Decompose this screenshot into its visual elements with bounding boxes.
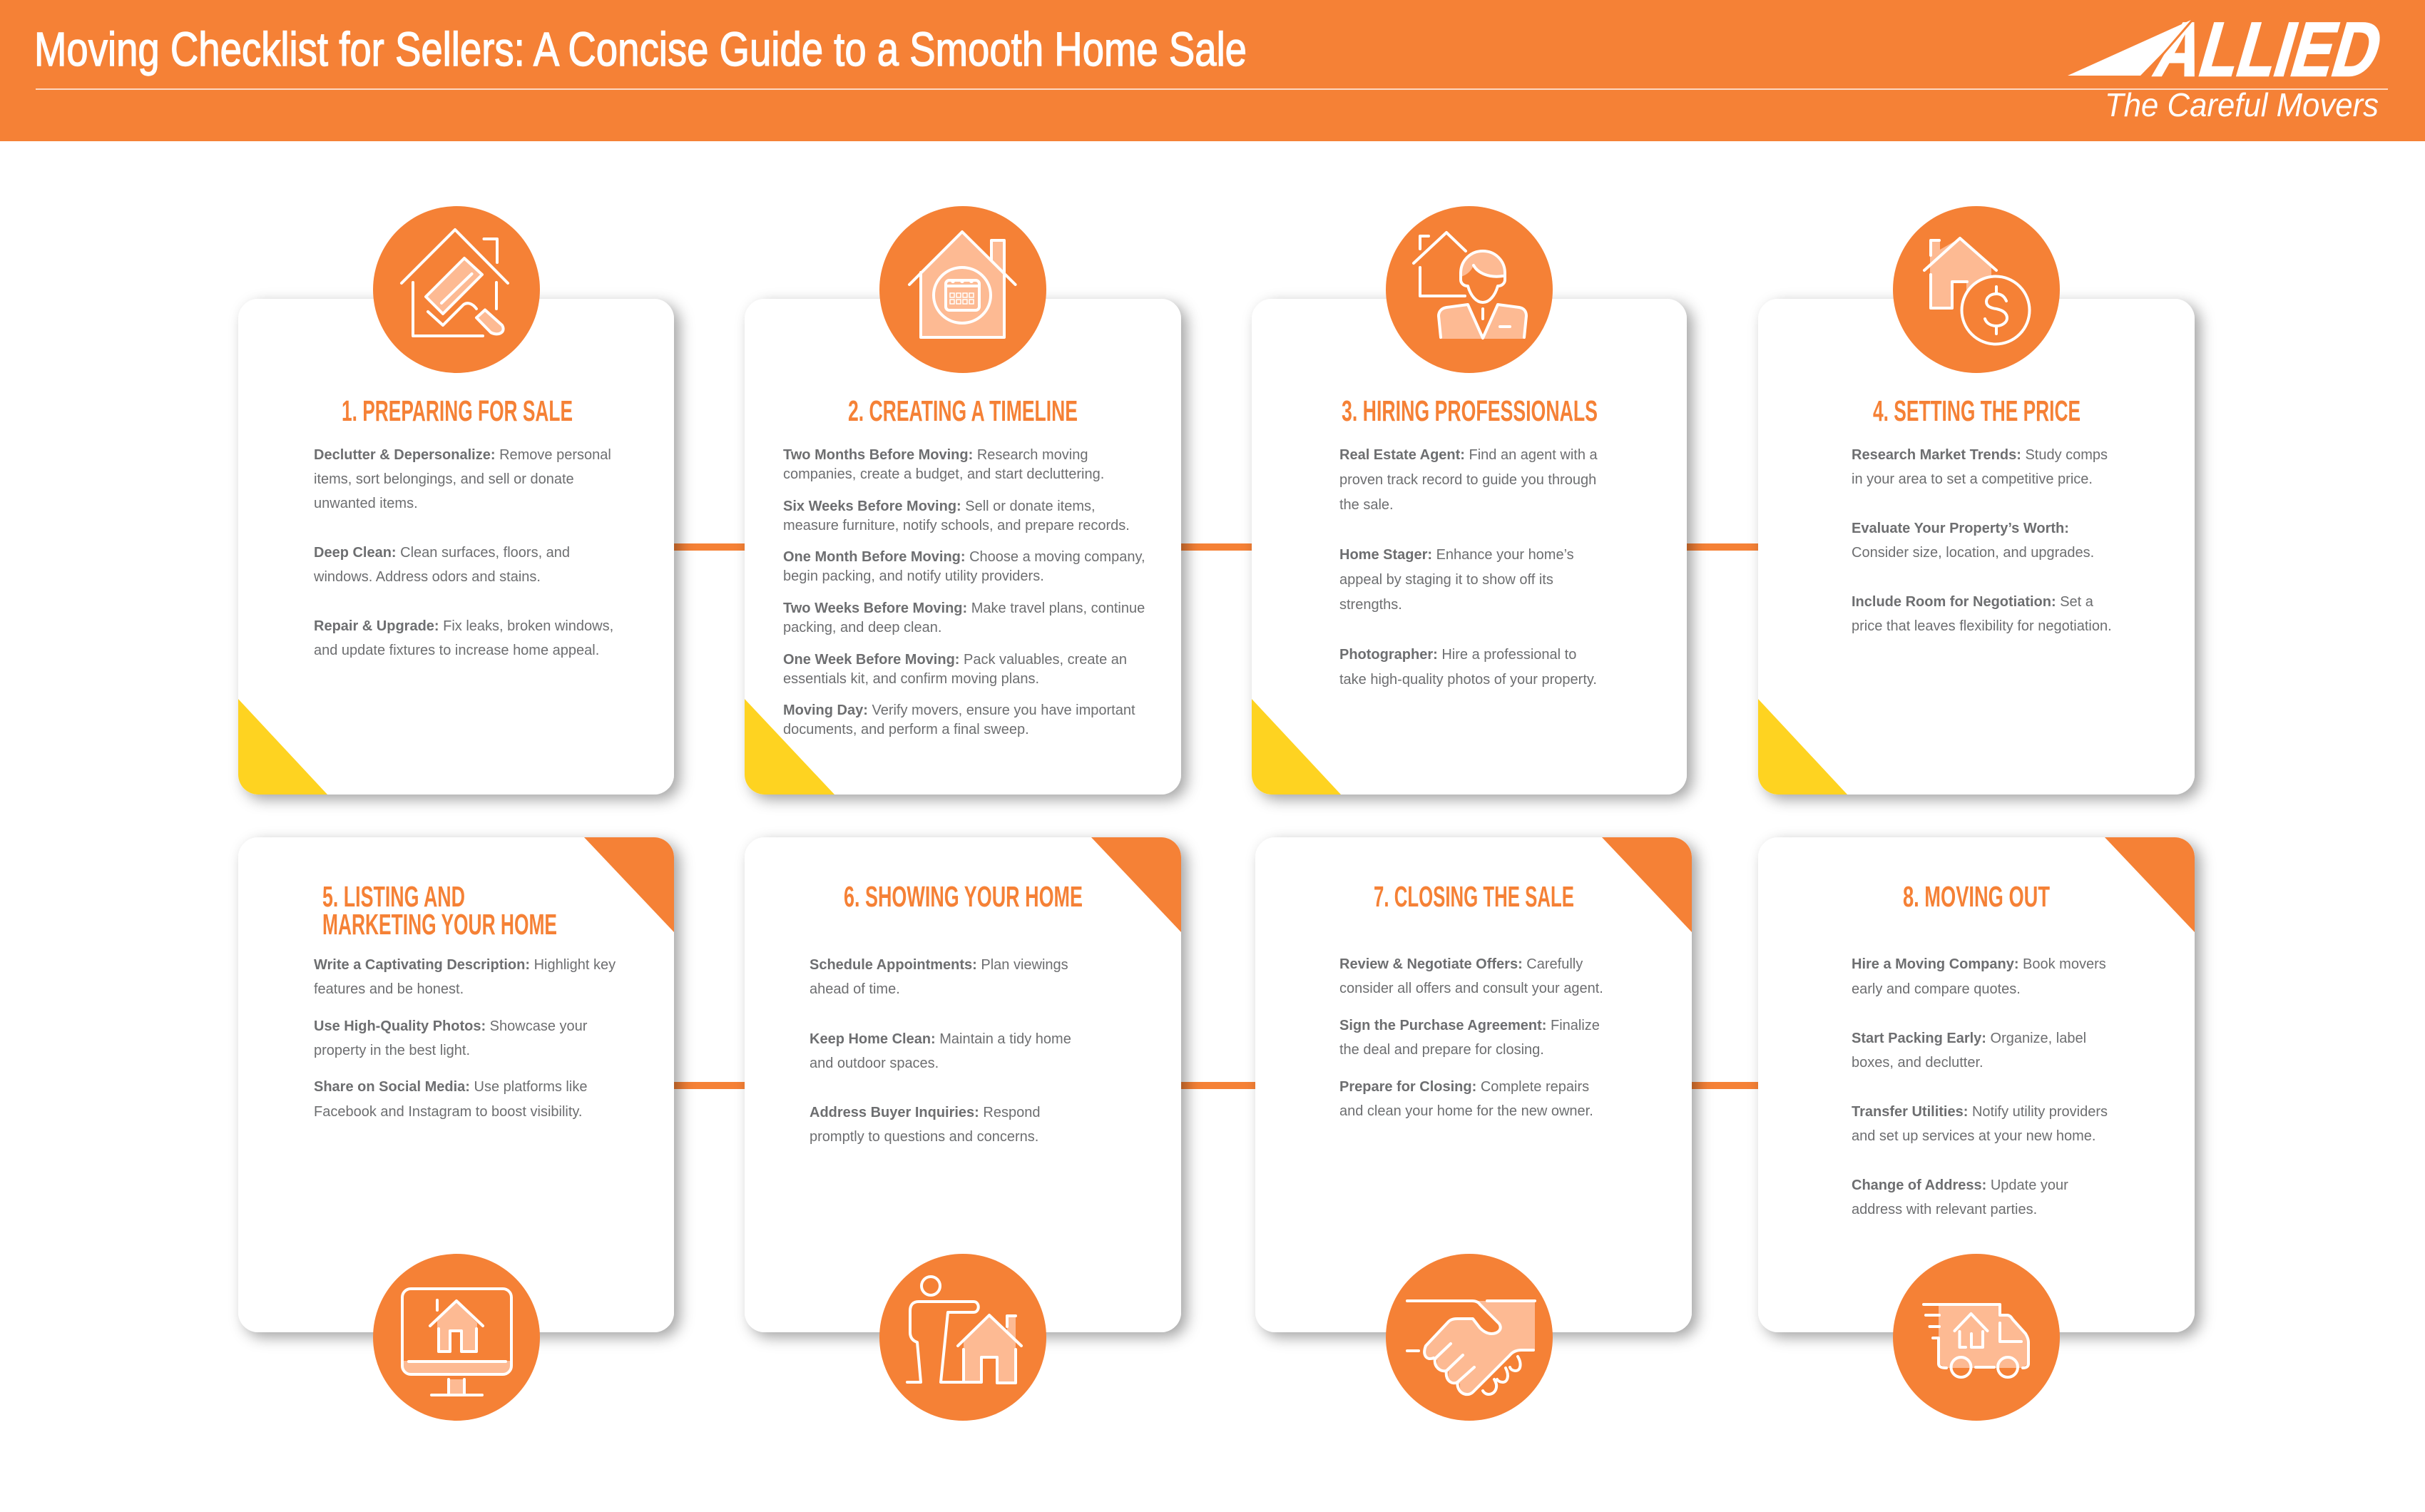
checklist text: Address Buyer Inquiries: Respond <box>810 1105 1040 1120</box>
checklist text: Repair & Upgrade: Fix leaks, broken windows, <box>314 618 613 634</box>
checklist text: and outdoor spaces. <box>810 1056 939 1071</box>
logo: Allied The Careful Movers <box>2068 7 2392 123</box>
checklist text: Declutter & Depersonalize: Remove personal <box>314 447 611 463</box>
checklist text: in your area to set a competitive price. <box>1852 471 2093 487</box>
checklist text: Keep Home Clean: Maintain a tidy home <box>810 1031 1071 1047</box>
checklist text: companies, create a budget, and start decluttering. <box>783 466 1104 482</box>
heading: 4. SETTING THE PRICE <box>1873 394 2081 427</box>
checklist text: Use High-Quality Photos: Showcase your <box>314 1018 588 1034</box>
heading: 1. PREPARING FOR SALE <box>342 394 573 427</box>
checklist text: and clean your home for the new owner. <box>1339 1103 1593 1119</box>
checklist text: Photographer: Hire a professional to <box>1339 647 1576 663</box>
checklist text: ahead of time. <box>810 981 900 997</box>
checklist text: Sign the Purchase Agreement: Finalize <box>1339 1018 1600 1033</box>
checklist text: Research Market Trends: Study comps <box>1852 447 2108 463</box>
checklist text: features and be honest. <box>314 981 464 997</box>
checklist text: Home Stager: Enhance your home’s <box>1339 547 1574 563</box>
icon: house with dollar coin <box>1893 206 2060 373</box>
checklist text: Write a Captivating Description: Highlight key <box>314 957 616 973</box>
icon: moving truck <box>1893 1254 2060 1421</box>
checklist text: address with relevant parties. <box>1852 1202 2037 1217</box>
checklist text: and update fixtures to increase home appeal. <box>314 643 599 658</box>
checklist text: Moving Day: Verify movers, ensure you have important <box>783 703 1135 718</box>
connector: row 1 <box>674 543 1758 551</box>
checklist text: the sale. <box>1339 497 1394 513</box>
checklist text: unwanted items. <box>314 496 418 511</box>
connector: row 2 <box>674 1082 1759 1089</box>
checklist text: windows. Address odors and stains. <box>313 569 541 585</box>
icon: house with calendar <box>879 206 1046 373</box>
panel: 3 hiring professionals <box>1252 299 1687 795</box>
checklist text: measure furniture, notify schools, and prepare records. <box>783 518 1130 533</box>
checklist text <box>1339 956 1603 1119</box>
icon: agent with house <box>1386 206 1553 373</box>
checklist text <box>314 957 616 1120</box>
panel: 8 moving out <box>1758 837 2195 1332</box>
checklist text: Two Months Before Moving: Research moving <box>783 447 1088 463</box>
heading <box>322 880 557 941</box>
icon: house with paint roller <box>373 206 540 373</box>
checklist text: essentials kit, and confirm moving plans. <box>783 671 1039 687</box>
heading: 8. MOVING OUT <box>1903 880 2050 913</box>
checklist text: Deep Clean: Clean surfaces, floors, and <box>314 545 570 561</box>
checklist text: Share on Social Media: Use platforms like <box>314 1079 587 1095</box>
panel: 5 listing and marketing <box>238 837 674 1332</box>
checklist text: Evaluate Your Property’s Worth: <box>1852 521 2069 536</box>
checklist text: Start Packing Early: Organize, label <box>1852 1031 2086 1046</box>
panel: 7 closing the sale <box>1255 837 1692 1332</box>
icon: person showing house <box>879 1254 1046 1421</box>
icon: monitor with house <box>373 1254 540 1421</box>
heading: 6. SHOWING YOUR HOME <box>844 880 1083 913</box>
checklist text: consider all offers and consult your agent. <box>1339 981 1603 996</box>
panel: 6 showing your home <box>745 837 1181 1332</box>
checklist text: Schedule Appointments: Plan viewings <box>810 957 1068 973</box>
logo: Allied The Careful Movers: The Careful Movers <box>2105 86 2379 123</box>
checklist text: packing, and deep clean. <box>783 620 941 635</box>
checklist text: items, sort belongings, and sell or donate <box>314 471 574 487</box>
checklist text: Include Room for Negotiation: Set a <box>1852 594 2094 610</box>
panel: 4 setting the price <box>1758 299 2195 795</box>
checklist text <box>1852 447 2112 634</box>
icon: handshake <box>1386 1254 1553 1421</box>
heading: 3. HIRING PROFESSIONALS <box>1342 394 1598 427</box>
header band <box>0 0 2425 141</box>
heading: 7. CLOSING THE SALE <box>1374 880 1574 913</box>
checklist text <box>1339 447 1598 688</box>
checklist text: appeal by staging it to show off its <box>1339 572 1553 588</box>
checklist text: Hire a Moving Company: Book movers <box>1852 956 2106 972</box>
checklist text: Two Weeks Before Moving: Make travel plans, continue <box>783 601 1145 616</box>
checklist text: proven track record to guide you through <box>1339 472 1596 488</box>
checklist text: promptly to questions and concerns. <box>810 1129 1038 1145</box>
checklist text: One Month Before Moving: Choose a moving company, <box>783 549 1145 565</box>
checklist text: property in the best light. <box>314 1043 470 1058</box>
title: Moving Checklist for Sellers: A Concise Guide to a Smooth Home Sale <box>34 23 1247 76</box>
heading: 5. LISTING AND <box>322 880 465 913</box>
checklist text: early and compare quotes. <box>1852 981 2021 997</box>
heading: 2. CREATING A TIMELINE <box>848 394 1078 427</box>
checklist text: Six Weeks Before Moving: Sell or donate items, <box>783 499 1096 514</box>
checklist text: boxes, and declutter. <box>1852 1055 1984 1071</box>
checklist text <box>783 447 1145 737</box>
checklist text: Change of Address: Update your <box>1852 1178 2068 1193</box>
checklist text <box>313 447 613 658</box>
checklist text: Prepare for Closing: Complete repairs <box>1339 1079 1589 1095</box>
checklist text: Facebook and Instagram to boost visibility. <box>314 1104 582 1120</box>
panel: 1 preparing for sale <box>238 299 674 795</box>
checklist text: take high-quality photos of your property. <box>1339 672 1597 688</box>
checklist text: Transfer Utilities: Notify utility providers <box>1852 1104 2108 1120</box>
heading: MARKETING YOUR HOME <box>322 908 557 941</box>
panel: 2 creating a timeline <box>745 299 1181 795</box>
checklist text: begin packing, and notify utility providers. <box>783 568 1044 584</box>
checklist text: strengths. <box>1339 597 1402 613</box>
checklist text: Consider size, location, and upgrades. <box>1852 545 2094 561</box>
checklist text: One Week Before Moving: Pack valuables, create an <box>783 652 1127 668</box>
checklist text: Real Estate Agent: Find an agent with a <box>1339 447 1598 463</box>
checklist text: Review & Negotiate Offers: Carefully <box>1339 956 1583 972</box>
checklist text: the deal and prepare for closing. <box>1339 1042 1544 1058</box>
checklist text <box>1852 956 2108 1217</box>
checklist text: documents, and perform a final sweep. <box>783 722 1029 737</box>
checklist text <box>810 957 1071 1145</box>
checklist text: and set up services at your new home. <box>1852 1128 2095 1144</box>
checklist text: price that leaves flexibility for negotiation. <box>1852 618 2112 634</box>
